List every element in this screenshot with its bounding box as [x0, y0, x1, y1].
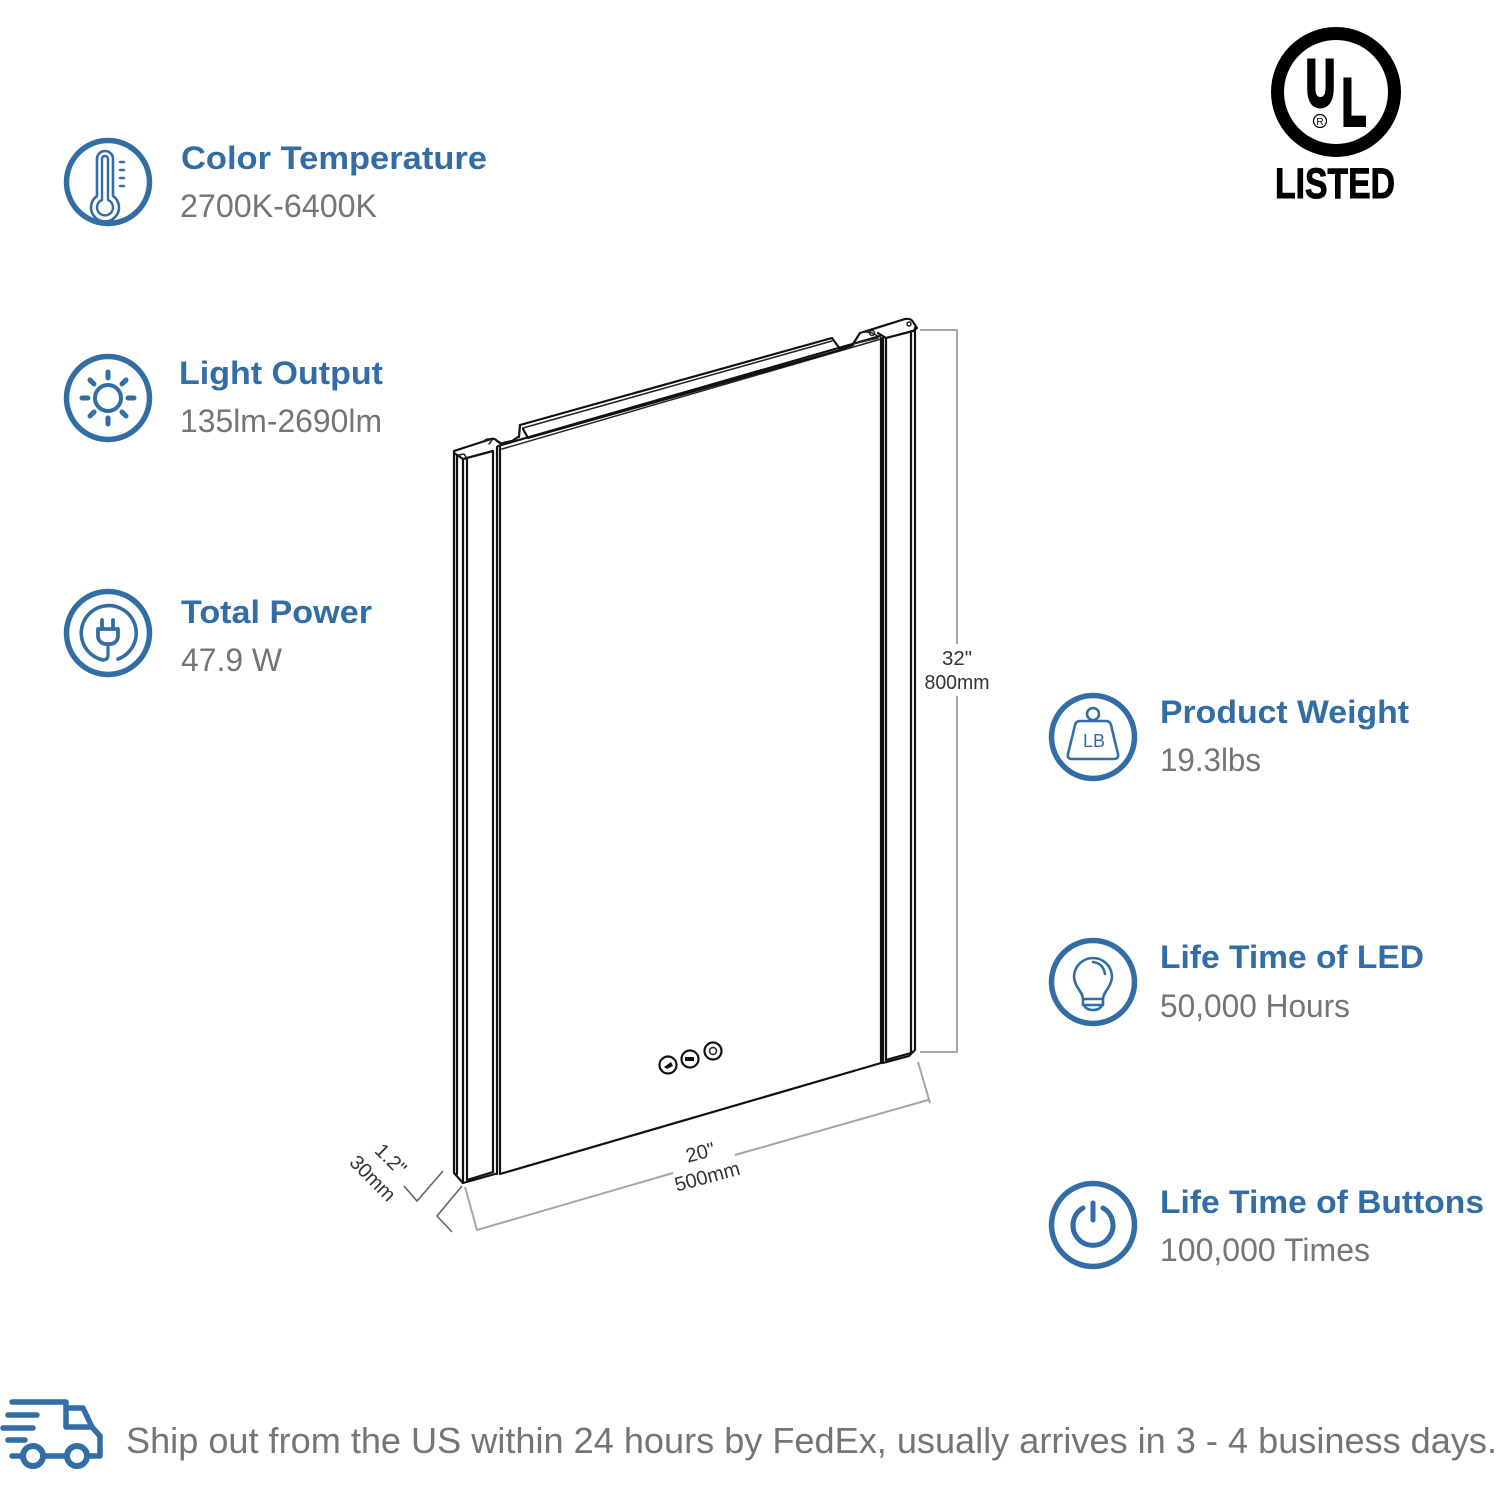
spec: total power [66, 592, 372, 678]
icon: light bulb [1052, 940, 1134, 1024]
heading: product weight: Product Weight [1160, 694, 1409, 730]
value: buttons life time: 100,000 Times [1160, 1232, 1370, 1268]
icon: plug [66, 592, 150, 674]
dimension: depth [345, 1140, 462, 1232]
spec: LED life time [1052, 939, 1424, 1024]
icon: thermometer [66, 140, 150, 224]
spec: buttons life time [1052, 1184, 1484, 1268]
spec: color temperature [66, 140, 487, 224]
mirror line drawing [454, 319, 917, 1183]
UL listed logo: U [1306, 46, 1335, 120]
heading: total power: Total Power [181, 594, 372, 630]
dimension: depth: 1.2" [370, 1140, 410, 1180]
icon: sun [66, 356, 150, 440]
right light strip [853, 319, 917, 1063]
shipping note: Ship out from the US within 24 hours by FedEx, usually arrives in 3 - 4 business days. [126, 1420, 1497, 1461]
icon: power button [1052, 1184, 1134, 1266]
dimension: height: 32" [942, 648, 972, 670]
dimension: width: 500mm [672, 1158, 743, 1196]
touch buttons [660, 1042, 722, 1074]
dimension: width [465, 1062, 930, 1230]
heading: LED life time: Life Time of LED [1160, 939, 1424, 975]
value: product weight: 19.3lbs [1160, 742, 1261, 778]
UL listed logo: L [1342, 65, 1366, 139]
dimension: height [920, 330, 990, 1052]
dimension: width: 20" [683, 1139, 717, 1168]
dimension: depth: 30mm [345, 1151, 400, 1206]
value: color temperature: 2700K-6400K [180, 188, 377, 224]
value: total power: 47.9 W [181, 642, 283, 678]
icon: weight [1052, 696, 1134, 778]
mirror glass [498, 336, 881, 1174]
UL listed logo: LISTED [1275, 160, 1395, 208]
spec: product weight [1052, 694, 1409, 778]
spec: light output [66, 355, 383, 440]
UL listed logo: R [1316, 117, 1324, 128]
heading: light output: Light Output [179, 355, 383, 391]
left light strip [454, 439, 502, 1183]
value: LED life time: 50,000 Hours [1160, 988, 1350, 1024]
heading: buttons life time: Life Time of Buttons [1160, 1184, 1484, 1220]
icon: delivery truck [3, 1402, 100, 1466]
shipping banner [3, 1402, 1497, 1466]
heading: color temperature: Color Temperature [181, 140, 487, 176]
dimension: height: 800mm [924, 672, 990, 694]
icon: weight: LB [1083, 731, 1105, 751]
UL listed logo [1275, 34, 1395, 208]
top mounting bar [503, 338, 853, 443]
value: light output: 135lm-2690lm [180, 403, 382, 439]
